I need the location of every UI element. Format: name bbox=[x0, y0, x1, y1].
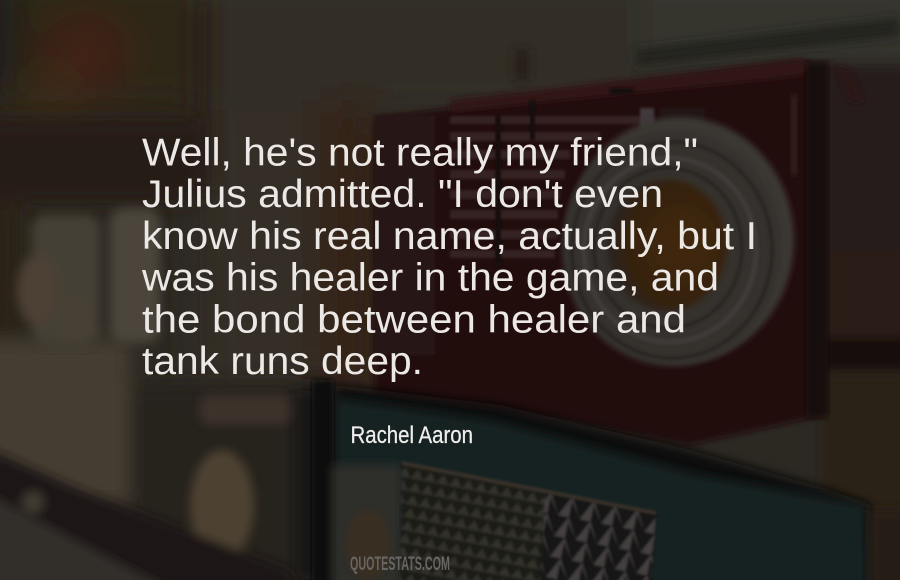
quote text: was his healer in the game, and bbox=[141, 256, 719, 300]
background photo: shelf objects bbox=[0, 208, 300, 580]
author name: Rachel Aaron bbox=[350, 422, 473, 449]
background photo: wall and shelf on right bbox=[515, 18, 900, 513]
quote text: Julius admitted. "I don't even bbox=[142, 173, 663, 216]
quote text: the bond between healer and bbox=[142, 298, 686, 342]
watermark: QUOTESTATS.COM bbox=[350, 554, 450, 575]
radio dial bbox=[562, 117, 794, 366]
quote text: know his real name, actually, but I bbox=[142, 215, 757, 258]
radio vent slats bbox=[375, 88, 705, 355]
speaker grille bbox=[400, 461, 656, 580]
quote text: tank runs deep. bbox=[142, 340, 423, 383]
quote text bbox=[141, 132, 757, 383]
radio body bbox=[375, 60, 864, 445]
quote text: Well, he's not really my friend," bbox=[142, 132, 698, 174]
radio speaker box bbox=[312, 380, 900, 580]
